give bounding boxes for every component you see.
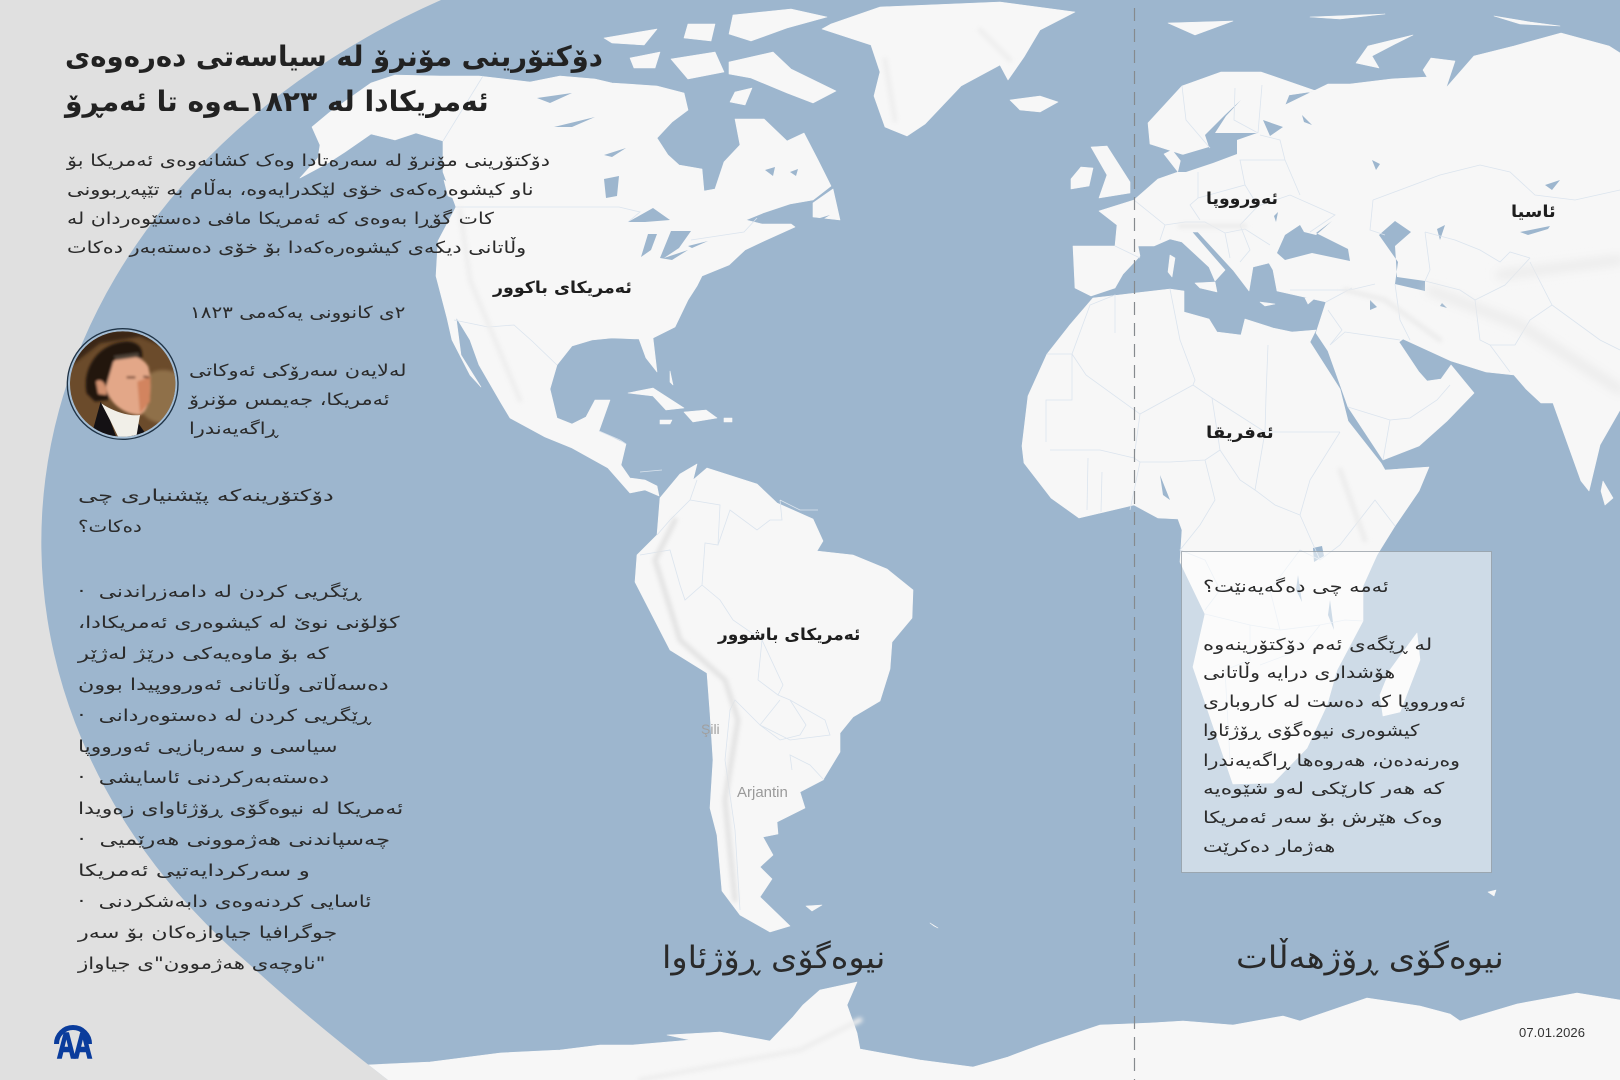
eurasia: [1073, 33, 1620, 491]
intro paragraph: [66, 151, 550, 257]
terrain shading: [486, 224, 1526, 1028]
panel body text: وەک هێرش بۆ سەر ئەمریکا: [1203, 808, 1443, 827]
panel: what does it mean: [1181, 551, 1492, 873]
aral and other lakes: [1263, 115, 1560, 310]
bullet list: سیاسی و سەربازیی ئەورووپا: [78, 737, 338, 756]
question heading: دەکات؟: [78, 517, 142, 536]
black sea: [1277, 221, 1350, 261]
bullet list: کۆلۆنی نوێ لە کیشوەری ئەمریکادا،: [78, 613, 400, 632]
arctic islands: [444, 9, 840, 424]
label: south america: ئەمریکای باشوور: [718, 625, 860, 644]
declaration text: لەلایەن سەرۆکی ئەوکاتی: [189, 361, 406, 380]
seas and lakes: [537, 93, 1560, 630]
africa: [1022, 289, 1429, 784]
country borders: [443, 76, 1620, 910]
title: [64, 40, 603, 118]
bullet list: ڕێگریی کردن لە دامەزراندنی ·: [78, 582, 361, 601]
south america: [635, 464, 913, 932]
bullet list: کە بۆ ماوەیەکی درێژ لەژێر: [78, 644, 329, 663]
panel body text: [1203, 635, 1466, 856]
bullet list: دەسەڵاتی وڵاتانی ئەورووپیدا بوون: [78, 675, 389, 694]
north american lakes: [537, 93, 830, 260]
declaration text: ئەمریکا، جەیمس مۆنرۆ: [189, 390, 390, 409]
intro paragraph: وڵاتانی دیکەی کیشوەرەکەدا بۆ خۆی دەستەبەر دەکات: [67, 238, 526, 257]
intro paragraph: ناو کیشوەرەکەی خۆی لێکدرایەوە، بەڵام بە تێپەڕبوونی: [67, 180, 534, 199]
bullet list: چەسپاندنی هەژموونی هەرێمیی ·: [78, 830, 390, 849]
bullet list: "ناوچەی هەژموون"ی جیاواز: [78, 954, 325, 973]
greenland: [822, 2, 1075, 136]
bullet list: دەستەبەرکردنی ئاسایشی ·: [78, 768, 329, 787]
heading: western hemisphere: نیوەگۆی ڕۆژئاوا: [662, 940, 885, 976]
panel body text: کە هەر کارێکی لەو شێوەیە: [1203, 779, 1444, 798]
intro paragraph: کات گۆڕا بەوەی کە ئەمریکا مافی دەستێوەردان لە: [67, 209, 494, 228]
bullet list: ڕێگریی کردن لە دەستوەردانی ·: [78, 706, 371, 725]
small islands: [806, 14, 1613, 928]
bullet list: [77, 582, 403, 973]
caspian sea: [1379, 221, 1425, 291]
bullet list: ئەمریکا لە نیوەگۆی ڕۆژئاوای زەویدا: [78, 799, 403, 818]
baltic sea: [1178, 100, 1257, 172]
panel body text: ئەورووپا کە دەست لە کاروباری: [1203, 692, 1466, 711]
heading: eastern hemisphere: نیوەگۆی ڕۆژهەڵات: [1236, 940, 1504, 976]
bullet list: و سەرکردایەتیی ئەمریکا: [78, 861, 310, 880]
date heading: ٢ی کانوونی یەکەمی ١٨٢٣: [190, 303, 405, 322]
title: دۆکتۆرینی مۆنرۆ لە سیاسەتی دەرەوەی: [65, 40, 603, 73]
panel body text: هەژمار دەکرێت: [1203, 837, 1335, 856]
question heading: دۆکتۆرینەکە پێشنیاری چی: [78, 486, 334, 505]
label: north america: ئەمریکای باکوور: [493, 278, 632, 297]
title: ئەمریکادا لە ١٨٢٣ـەوە تا ئەمڕۆ: [65, 85, 489, 118]
label: argentina: Arjantin: [737, 784, 788, 801]
declaration text: ڕاگەیەندرا: [189, 419, 278, 438]
panel body text: لە ڕێگەی ئەم دۆکتۆرینەوە: [1203, 635, 1432, 654]
panel heading: ئەمە چی دەگەیەنێت؟: [1203, 577, 1389, 596]
panel body text: وەرنەدەن، هەروەها ڕاگەیەندرا: [1203, 751, 1460, 770]
meridian dashed line: [1134, 8, 1136, 1080]
label: asia: ئاسیا: [1511, 202, 1556, 221]
bullet list: جوگرافیا جیاوازەکان بۆ سەر: [78, 923, 337, 942]
bullet list: ئاسایی کردنەوەی دابەشکردنی ·: [78, 892, 371, 911]
panel body text: هۆشداری درایە وڵاتانی: [1203, 663, 1395, 682]
intro paragraph: دۆکتۆرینی مۆنرۆ لە سەرەتادا وەک کشانەوەی ئەمریکا بۆ: [67, 151, 550, 170]
label: africa: ئەفریقا: [1206, 423, 1274, 442]
portrait of james monroe: [67, 329, 190, 440]
date stamp: 07.01.2026: [1519, 1025, 1585, 1040]
african lakes and rivers: [1160, 475, 1334, 630]
antarctica: [340, 982, 1620, 1080]
panel body text: کیشوەری نیوەگۆی ڕۆژئاوا: [1203, 721, 1419, 740]
question heading: [78, 486, 334, 536]
north america: [300, 75, 831, 496]
label: europe: ئەورووپا: [1206, 189, 1278, 208]
label: chile: Şili: [701, 721, 720, 737]
declaration text: [188, 361, 406, 438]
agency logo: AA: [57, 1026, 92, 1066]
